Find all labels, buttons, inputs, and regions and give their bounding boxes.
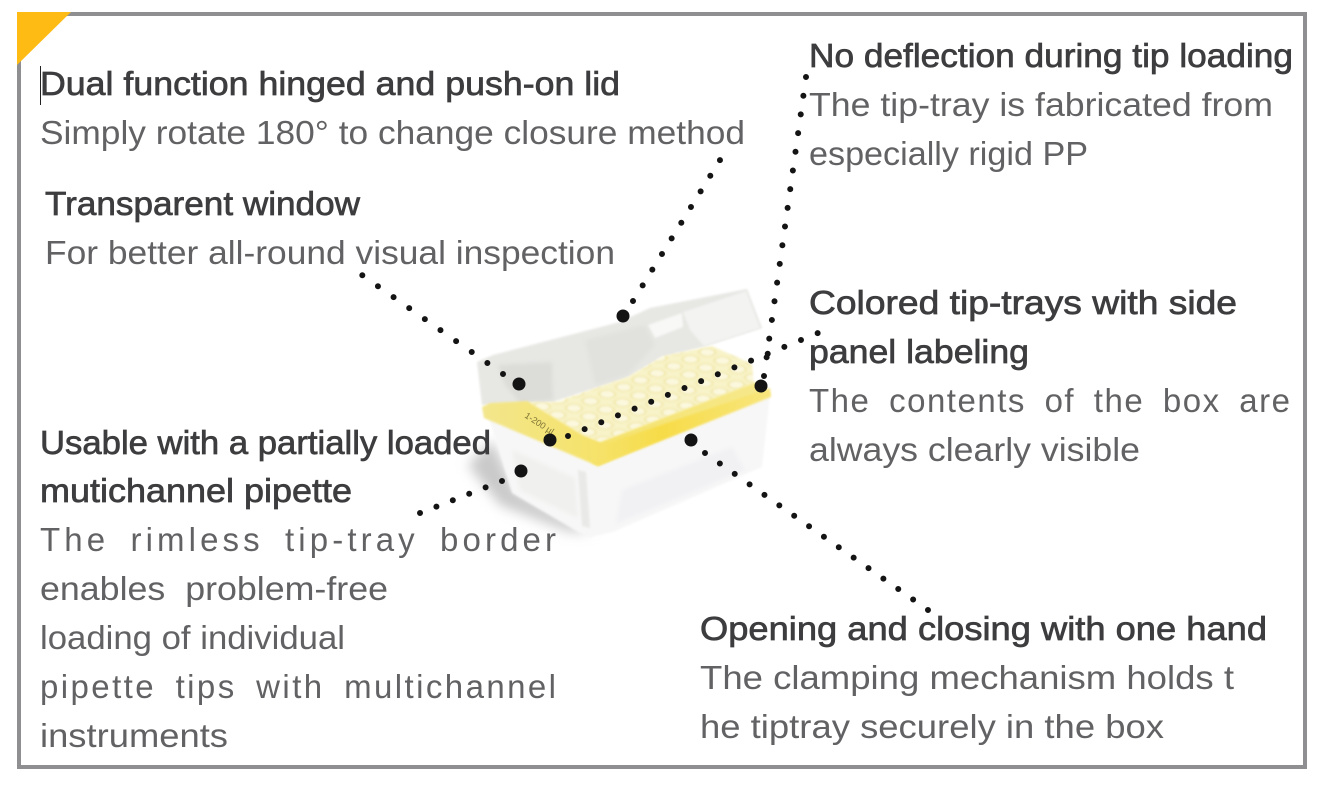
yellow rim side [590, 388, 771, 466]
lid inner shade [585, 325, 655, 385]
callout: partially loaded pipette: mutichannel pipette [40, 472, 352, 509]
box shadow [468, 440, 592, 532]
callout: partially loaded pipette: pipette tips with multichannel [40, 668, 556, 705]
callout: dual function lid [40, 65, 745, 151]
open lid [477, 289, 762, 405]
callout: dual function lid: Simply rotate 180° to change closure method [40, 114, 745, 151]
callout: colored tip-trays: panel labeling [809, 333, 1029, 370]
leader: partial loading [420, 464, 528, 513]
callout: no deflection: The tip-tray is fabricated from [809, 86, 1273, 123]
callout: no deflection [809, 37, 1293, 172]
callout: one-hand opening: The clamping mechanism holds t [700, 659, 1234, 696]
callout: partially loaded pipette: Usable with a partially loaded [40, 424, 491, 461]
callout: colored tip-trays: The contents of the box are [809, 382, 1290, 419]
yellow rim top [482, 382, 771, 466]
callout: partially loaded pipette: instruments [40, 717, 228, 754]
leader: window [362, 275, 526, 390]
lid bright right panel [683, 291, 760, 346]
callout: colored tip-trays [809, 284, 1290, 468]
callout: partially loaded pipette: loading of individual [40, 619, 345, 656]
leader: clamping [684, 434, 928, 610]
corner accent triangle [17, 12, 71, 65]
callout: one-hand opening: Opening and closing with one hand [700, 610, 1267, 647]
callout: no deflection: especially rigid PP [809, 135, 1088, 172]
callout: partially loaded pipette [40, 424, 556, 754]
pipette tips [527, 346, 754, 442]
callout: colored tip-trays: Colored tip-trays with side [809, 284, 1237, 321]
lid clasp [648, 313, 683, 338]
product photo: pipette tip box [468, 289, 771, 537]
leader: colored tray [544, 333, 818, 446]
callout: one-hand opening [700, 610, 1267, 745]
callout: dual function lid: Dual function hinged and push-on lid [40, 65, 620, 102]
base right panel [616, 447, 745, 524]
callout: one-hand opening: he tiptray securely in the box [700, 708, 1165, 745]
cursor bar [40, 66, 41, 105]
leader: lid [616, 160, 720, 322]
base left panel [512, 450, 578, 518]
box base [488, 395, 770, 537]
callout: partially loaded pipette: The rimless tip-tray border [40, 521, 556, 558]
callout: transparent window: Transparent window [45, 185, 360, 222]
lid window [498, 362, 553, 403]
callout: no deflection: No deflection during tip loading [809, 37, 1293, 74]
callout: transparent window: For better all-round visual inspection [45, 234, 615, 271]
callout: partially loaded pipette: enables problem-free [40, 570, 388, 607]
leader: deflection [754, 77, 806, 392]
base corner shade [578, 470, 590, 528]
callout: colored tip-trays: always clearly visible [809, 431, 1140, 468]
volume marking: 1-200 µl [523, 410, 556, 436]
callout: transparent window [45, 185, 615, 271]
